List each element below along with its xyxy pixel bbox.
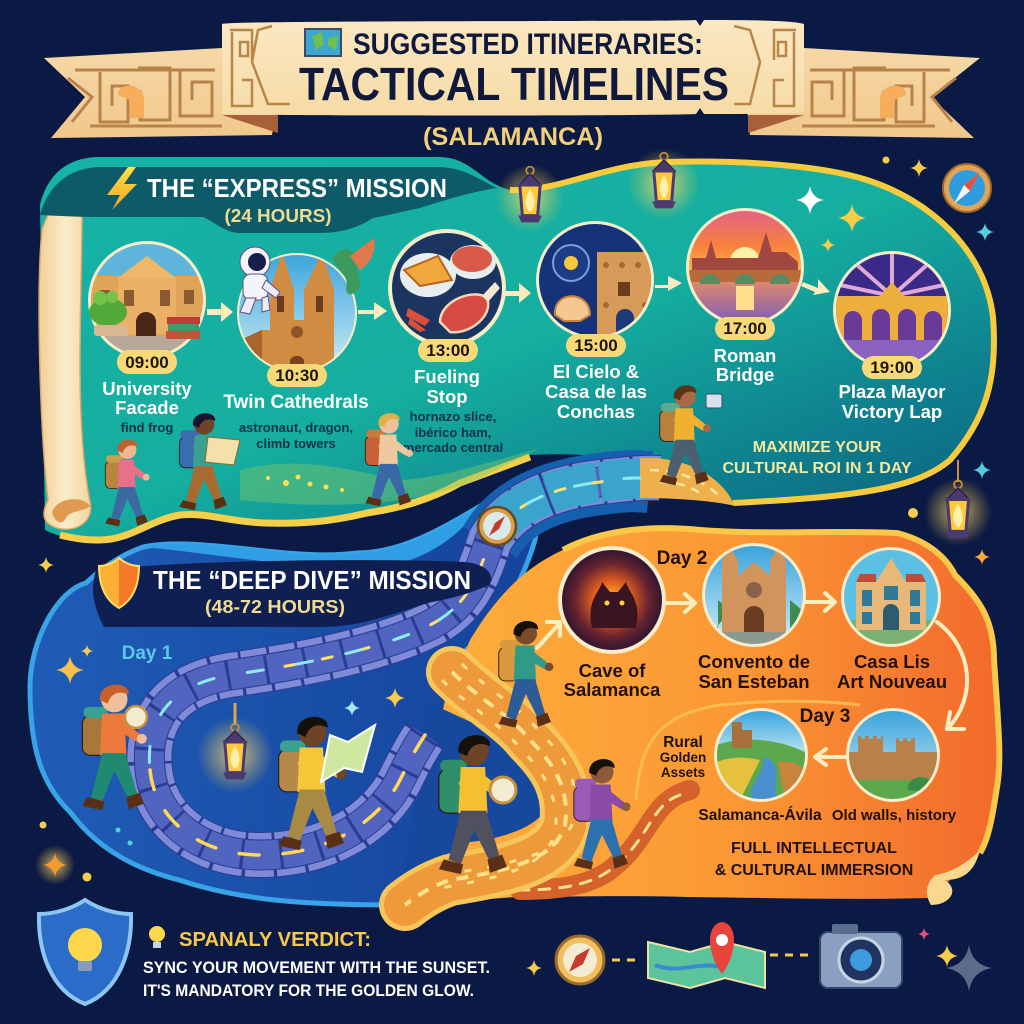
express duration: (24 HOURS) [224,206,332,226]
travellers: deep dive [82,621,630,874]
label: Rural [663,734,703,751]
winding cobblestone road: blue [149,458,735,855]
time: 10:30 [275,366,319,385]
callout: full intellectual immersion: FULL INTELLECTUAL [731,840,897,857]
gold rim [563,528,999,853]
time [566,334,626,357]
icon: compass on road [478,507,516,545]
heading bar: express mission [40,167,497,233]
verdict heading: SPANALY VERDICT: [179,929,371,951]
title banner [222,20,804,116]
stop: twin cathedrals [223,238,374,451]
note: find frog [121,420,173,435]
panel: express mission [39,157,994,540]
icons: held compasses [125,706,516,803]
deep dive title: THE “DEEP DIVE” MISSION [153,565,471,595]
food: hornazo [400,253,456,297]
label: Assets [661,765,705,780]
time: 13:00 [426,341,470,360]
icon: bulb [149,926,165,948]
label: Twin Cathedrals [223,392,369,413]
yellow rim bottom [60,457,530,540]
scroll curl [927,850,980,905]
icon: camera [820,924,902,988]
scroll edge [39,205,91,529]
stop: convento de san esteban [698,543,810,692]
inner light band [636,701,860,800]
day 2 label: Day 2 [657,548,707,569]
label: El Cielo & [553,361,639,382]
food: sausage [406,308,430,332]
callout: maximize roi: CULTURAL ROI IN 1 DAY [722,460,912,477]
verdict text [143,926,490,1000]
food: ham slices [450,245,496,279]
wave crest [143,505,482,568]
label: Facade [115,397,179,418]
time [267,364,327,387]
icon: bottom map with pin [648,922,765,988]
lanterns [496,148,992,546]
heading: suggested itineraries: SUGGESTED ITINERARIES: [353,28,703,61]
label: Casa Lis [854,651,930,672]
note: hornazo slice, [410,409,496,424]
yellow rim right [510,162,994,503]
golden road in orange panel [405,664,576,905]
stop: roman bridge [686,208,804,385]
sparkles [35,156,994,991]
stop: old walls [832,708,957,824]
time [418,339,478,362]
callout: maximize roi: MAXIMIZE YOUR [753,439,882,456]
glowing dots [266,474,344,492]
note: mercado central [403,440,503,455]
note: ibérico ham, [415,425,491,440]
icon: small map and camera [205,394,722,465]
stop: university facade [88,241,206,435]
icon: lightning [107,167,137,210]
panel: deep dive blue [30,505,555,905]
panel: deep dive orange [410,528,999,905]
stop: casa lis [837,547,947,692]
banner ribbons [44,48,980,138]
time: 15:00 [574,336,618,355]
label: Convento de [698,651,810,672]
stop: plaza mayor [833,251,951,422]
callout: full intellectual immersion: & CULTURAL IMMERSION [715,862,913,879]
deep dive duration: (48-72 HOURS) [205,597,345,617]
time [862,356,922,379]
time: 17:00 [723,319,767,338]
label: Old walls, history [832,807,957,824]
scroll curl [52,499,90,522]
day 3 label: Day 3 [800,706,850,727]
label: Cave of [579,660,646,681]
verdict line one: SYNC YOUR MOVEMENT WITH THE SUNSET. [143,959,490,977]
label: Roman [714,345,776,366]
label: Art Nouveau [837,671,947,692]
label: Stop [426,386,468,407]
small dashed trail [520,790,690,890]
note: astronaut, dragon, [239,420,353,435]
icon: zodiac sky [553,245,589,281]
stop: fueling stop [390,231,504,455]
label: Casa de las [545,381,647,402]
icon: road lantern [197,703,273,793]
dashed route line [612,955,810,960]
heading: tactical timelines: TACTICAL TIMELINES [299,58,729,110]
label: Golden [660,750,706,765]
time [117,350,177,374]
connector arrows: deep dive [537,593,967,765]
caption: Salamanca-Ávila [698,807,822,824]
express title: THE “EXPRESS” MISSION [147,173,447,203]
label: Bridge [716,364,774,385]
stop: cave of salamanca [560,548,664,700]
lower sheen [240,448,540,505]
label: Conchas [557,401,635,422]
icon: astronaut [240,247,280,314]
label: Fueling [414,366,480,387]
icon: dragon [332,238,374,294]
icon: bottom compass [556,936,604,984]
stop: rural golden assets [660,708,822,824]
label: Salamanca [564,679,661,700]
gold stretch [640,458,735,506]
connector arrows: express [207,276,830,322]
blue inner pool [400,700,552,880]
note: climb towers [256,436,336,451]
icon: shield [99,558,139,608]
icon: frog [89,291,128,336]
stop: el cielo and casa de las conchas [536,221,655,422]
icon: books [166,317,200,339]
icon: compass top right [943,164,991,212]
blue halo under upper road [490,481,650,542]
cyan stretch [492,479,650,535]
label: San Esteban [698,671,810,692]
label: Plaza Mayor [839,381,945,402]
icon: folding map held by hiker [321,725,375,782]
time [715,317,775,340]
day 1 label: Day 1 [122,643,173,664]
label: Victory Lap [842,401,942,422]
icon: map [305,29,341,56]
heading bar: deep dive mission [93,558,491,627]
verdict line two: IT'S MANDATORY FOR THE GOLDEN GLOW. [143,982,474,1000]
icon: shell [555,296,590,321]
label: University [102,378,192,399]
time: 09:00 [125,353,169,372]
time: 19:00 [870,358,914,377]
travellers: express [105,385,711,526]
subtitle: (SALAMANCA) [423,123,603,151]
verdict shield [39,900,131,1004]
food: iberico ham [440,282,500,332]
